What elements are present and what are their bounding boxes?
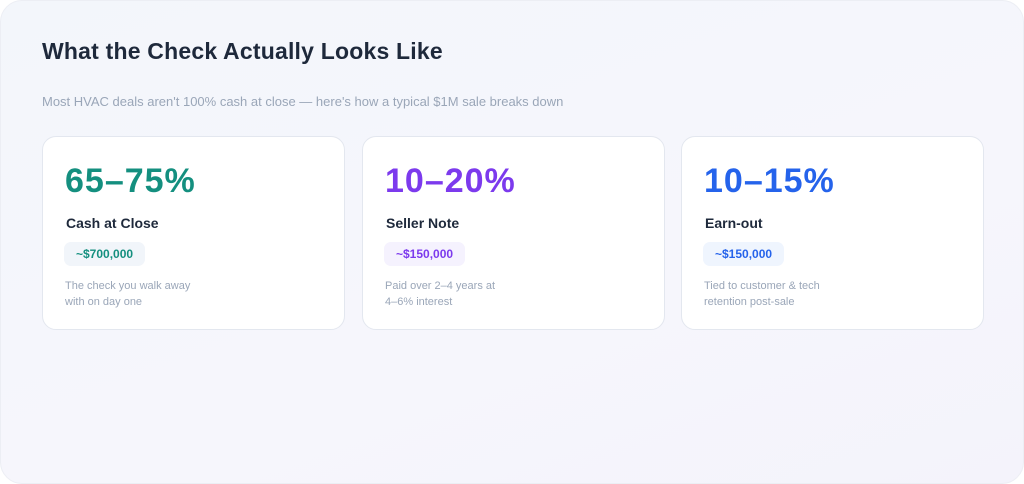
card: cash at close: 65–75% (65, 162, 196, 200)
card: cash at close: The check you walk away (65, 280, 190, 292)
card: cash at close (42, 136, 345, 330)
card: seller note: Seller Note (386, 215, 459, 231)
card: seller note (362, 136, 665, 330)
card: seller note: Paid over 2–4 years at (385, 280, 495, 292)
title: What the Check Actually Looks Like (42, 38, 443, 64)
card: cash at close: ~$700,000 (76, 247, 133, 261)
card: earn-out (681, 136, 984, 330)
card: earn-out: ~$150,000 (715, 247, 772, 261)
card: seller note: ~$150,000 (396, 247, 453, 261)
card: cash at close: with on day one (65, 296, 142, 308)
subtitle: Most HVAC deals aren't 100% cash at close — here's how a typical $1M sale breaks down (42, 94, 563, 109)
card: earn-out: Tied to customer & tech (704, 280, 820, 292)
card: earn-out: 10–15% (704, 162, 835, 200)
card: seller note: 10–20% (385, 162, 516, 200)
card: seller note: 4–6% interest (385, 296, 452, 308)
card: earn-out: retention post-sale (704, 296, 794, 308)
card: cash at close: Cash at Close (66, 215, 159, 231)
card: earn-out: Earn-out (705, 215, 763, 231)
